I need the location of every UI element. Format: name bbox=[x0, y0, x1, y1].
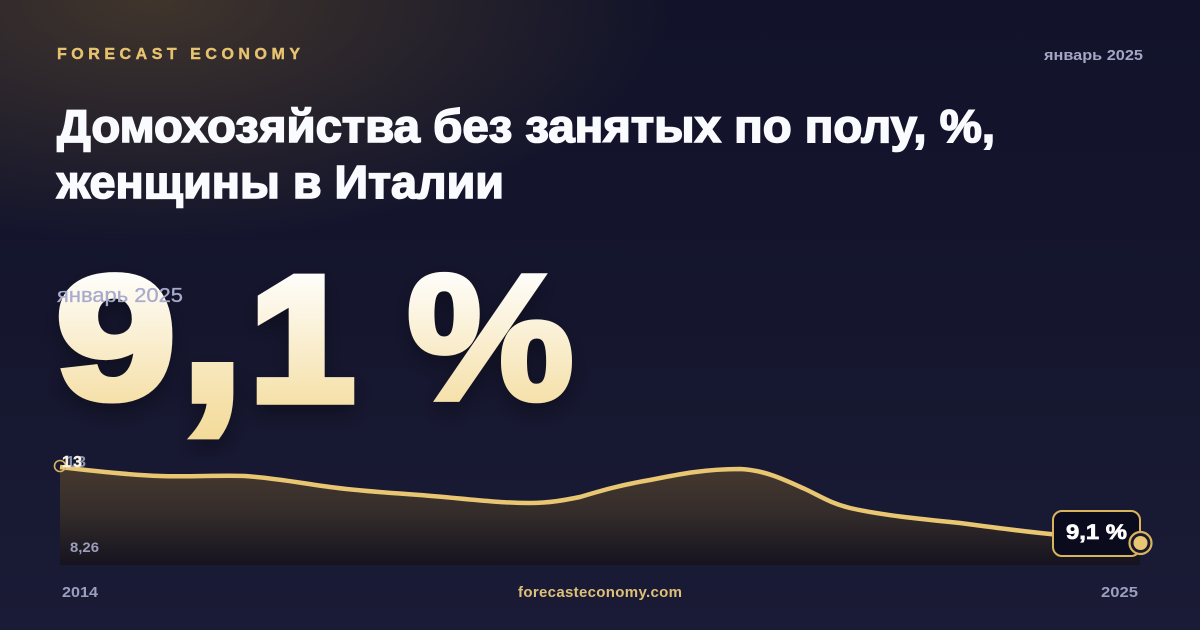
end marker bbox=[1130, 532, 1152, 554]
title: Домохозяйства без занятых по полу, %, bbox=[57, 100, 995, 152]
min label: 8,26 bbox=[70, 539, 99, 555]
big value: 1 bbox=[250, 240, 354, 438]
value callout bbox=[1053, 511, 1140, 556]
value callout: 9,1 % bbox=[1066, 521, 1127, 544]
end year: 2025 bbox=[1101, 584, 1138, 601]
subtitle date over value: январь 2025 bbox=[57, 285, 183, 307]
brand label: FORECAST ECONOMY bbox=[57, 46, 300, 63]
max label: 13 bbox=[62, 454, 82, 471]
big value: % bbox=[407, 237, 574, 437]
chart line bbox=[60, 467, 1140, 543]
title: женщины в Италии bbox=[56, 156, 504, 208]
big value: 9 bbox=[56, 239, 176, 435]
max label: 13 bbox=[66, 454, 86, 471]
title bbox=[56, 100, 995, 208]
chart area fill bbox=[60, 467, 1140, 565]
source site: forecasteconomy.com bbox=[518, 584, 682, 601]
start marker bbox=[54, 460, 66, 472]
date top right: январь 2025 bbox=[1044, 47, 1143, 64]
big value: , bbox=[179, 192, 245, 449]
area chart bbox=[54, 454, 1152, 565]
start year: 2014 bbox=[62, 584, 99, 601]
big value bbox=[56, 192, 574, 449]
